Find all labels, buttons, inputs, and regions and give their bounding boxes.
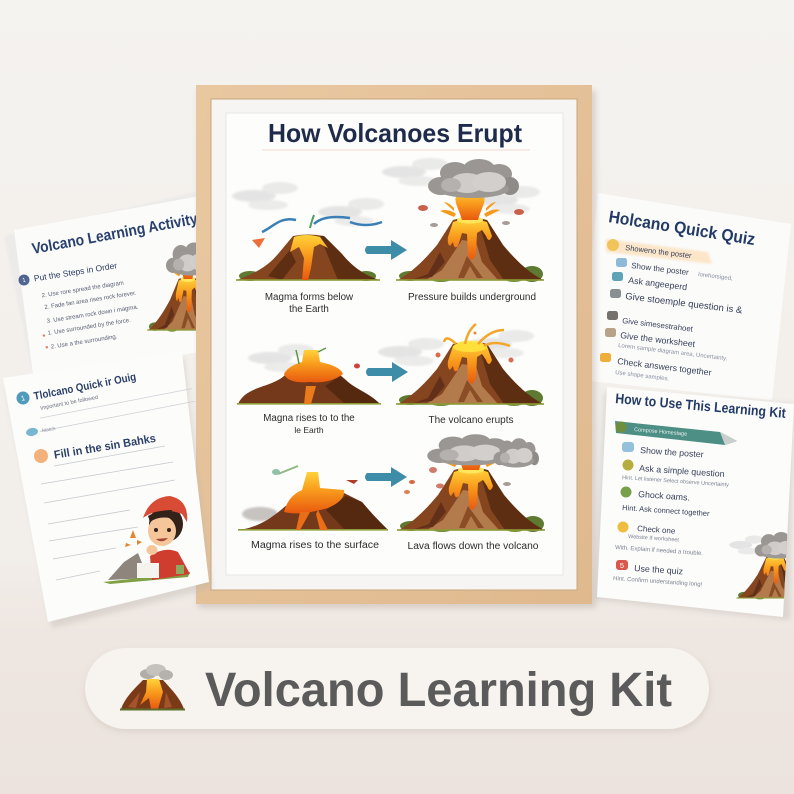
worksheet heading two (33, 430, 157, 465)
quiz rows: lorehorsiged, (698, 272, 733, 282)
kit step list: Check one (637, 524, 676, 536)
green banner (615, 421, 737, 445)
icon: magma breaking out (238, 466, 388, 531)
worksheet heading one: 1 (21, 395, 26, 403)
arrow 3 (365, 467, 407, 487)
step: pressure builds underground (382, 158, 544, 303)
icon: worksheet volcano (147, 242, 229, 332)
icon: volcano with lava flows (397, 434, 545, 532)
step list: 1 (22, 278, 27, 284)
worksheet heading two: Fill in the sin Bahks (53, 433, 157, 462)
kit step list: Hint. Confirm understanding long! (613, 576, 703, 588)
quiz rows: Give stoemple question is & (625, 291, 744, 316)
caption: Pressure builds underground (408, 292, 536, 303)
quiz rows: Use shape samples. (615, 370, 670, 383)
kit step list: Show the poster (640, 445, 704, 459)
quiz rows: Check answers together (617, 356, 712, 378)
step list: 2. Use rore spread the diagram (41, 280, 124, 299)
arrow 1 (365, 240, 407, 260)
small badge: Match (42, 426, 56, 434)
quiz rows: Ask angeeperd (628, 275, 688, 292)
caption: the Earth (289, 304, 329, 315)
title pill (85, 648, 710, 732)
step list: 2. Fade fan area rises rock forever. (44, 291, 137, 311)
worksheet heading one: Tlolcano Quick ir Ouig (33, 371, 137, 403)
caption: le Earth (294, 425, 324, 435)
quiz rows: Give simesestrahoet (622, 316, 694, 334)
step: the volcano erupts (378, 324, 544, 426)
small badge (25, 424, 56, 437)
step: lava flows down the volcano (397, 434, 545, 552)
quiz rows: Show the poster (631, 261, 690, 277)
quiz rows: Give the worksheet (620, 330, 696, 349)
writing lines (41, 446, 175, 580)
quiz title: Holcano Quick Quiz (607, 207, 757, 249)
kit step list: Use the quiz (634, 563, 683, 576)
quiz rows: Showeno the poster (625, 243, 693, 260)
green banner: Compose Homestage (634, 427, 687, 438)
quiz rows (600, 239, 744, 383)
quiz rows: Lorem sample diagram area, Uncertainty. (618, 343, 728, 362)
icon: kit sheet volcano (730, 532, 788, 600)
paper: quick quiz and fill in the blanks (3, 352, 212, 628)
kit step list: 5 (620, 561, 624, 570)
kit step list: Ghock oams. (638, 489, 690, 503)
paper: how to use this learning kit (594, 387, 794, 620)
kit step list: Ask a simple question (639, 463, 725, 479)
poster title: How Volcanoes Erupt (268, 118, 522, 148)
pill label: Volcano Learning Kit (205, 664, 672, 717)
caption: The volcano erupts (428, 415, 514, 426)
icon: low dome volcano (237, 344, 381, 405)
shadow behind frame (198, 90, 596, 608)
worksheet heading one (15, 360, 195, 435)
kit step list: Website If worksheet (628, 534, 680, 544)
step: magma rises to the surface (238, 466, 388, 551)
icon: volcano with pressure plume (382, 158, 544, 282)
kit step list (613, 442, 729, 588)
kit step list: Hint. Let listener Select observe Uncertainty (622, 475, 729, 488)
worksheet heading one: Important to be followed (40, 395, 99, 412)
step list: 2. Use a the surrounding. (50, 334, 118, 351)
activity worksheet title: Volcano Learning Activity (31, 211, 199, 258)
icon: erupting volcano (378, 324, 544, 406)
paper: volcano quick quiz (580, 193, 791, 400)
step list: 1. Use surrounded by the force. (47, 318, 132, 337)
step: magma forms below the Earth (232, 182, 384, 315)
step list: Put the Steps in Order (33, 260, 118, 283)
kit step list: Hint. Ask connect together (622, 503, 710, 518)
icon: pill volcano (120, 664, 185, 710)
step list: 3. Use stream rock down i magma. (46, 304, 139, 325)
caption: Lava flows down the volcano (408, 541, 539, 552)
caption: Magna rises to to the (263, 413, 355, 424)
arrow 2 (366, 362, 408, 382)
wooden picture frame with poster (196, 85, 592, 604)
kit step list: With. Explain if needed a trouble. (615, 545, 703, 557)
caption: Magma rises to the surface (251, 540, 380, 551)
illustration: boy in red cap (103, 496, 190, 584)
step: magma rises (237, 344, 381, 435)
paper: volcano learning activity worksheet (4, 192, 229, 382)
icon: forming volcano (232, 182, 384, 281)
caption: Magma forms below (265, 292, 354, 303)
step list (18, 257, 144, 354)
